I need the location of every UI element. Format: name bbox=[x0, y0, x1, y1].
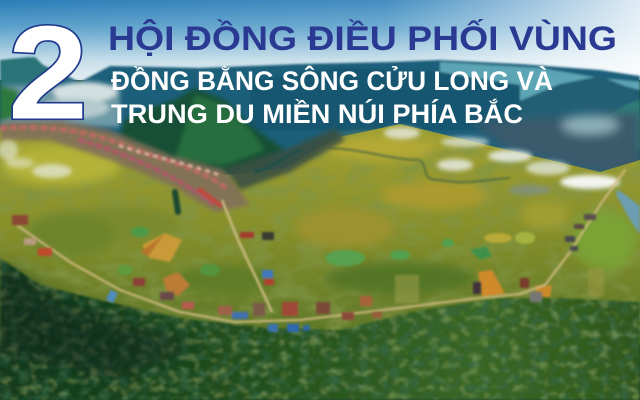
winding stream bbox=[330, 148, 510, 182]
low clouds left bbox=[0, 82, 120, 127]
rice fields bbox=[0, 124, 640, 345]
field colour patches bbox=[0, 136, 637, 294]
branch road bbox=[222, 200, 272, 312]
subtitle: Đồng bằng sông Cửu Long và Trung du miền núi phía Bắc bbox=[111, 66, 553, 129]
sky background bbox=[0, 0, 640, 80]
subtitle: Đồng bằng sông Cửu Long và Trung du miền núi phía Bắc: ĐỒNG BẰNG SÔNG CỬU LONG VÀ bbox=[111, 66, 553, 96]
subtitle: Đồng bằng sông Cửu Long và Trung du miền núi phía Bắc: TRUNG DU MIỀN NÚI PHÍA BẮC bbox=[111, 99, 523, 129]
main curved road bbox=[18, 170, 625, 322]
big number 2: 2 bbox=[8, 0, 88, 148]
forest foreground bbox=[0, 258, 640, 400]
central green hill bbox=[110, 88, 285, 180]
white clouds over fields bbox=[0, 127, 620, 195]
right valley town haze bbox=[470, 112, 640, 178]
dark shadow on left slope bbox=[0, 262, 200, 380]
distant mountains bbox=[0, 57, 640, 190]
river at right edge bbox=[616, 190, 640, 234]
orange and green plots bbox=[117, 227, 604, 303]
houses along the road bbox=[12, 214, 596, 332]
title: Hội đồng điều phối vùng: HỘI ĐỒNG ĐIỀU PHỐI VÙNG bbox=[108, 19, 617, 58]
village along the valley edge bbox=[0, 120, 345, 212]
